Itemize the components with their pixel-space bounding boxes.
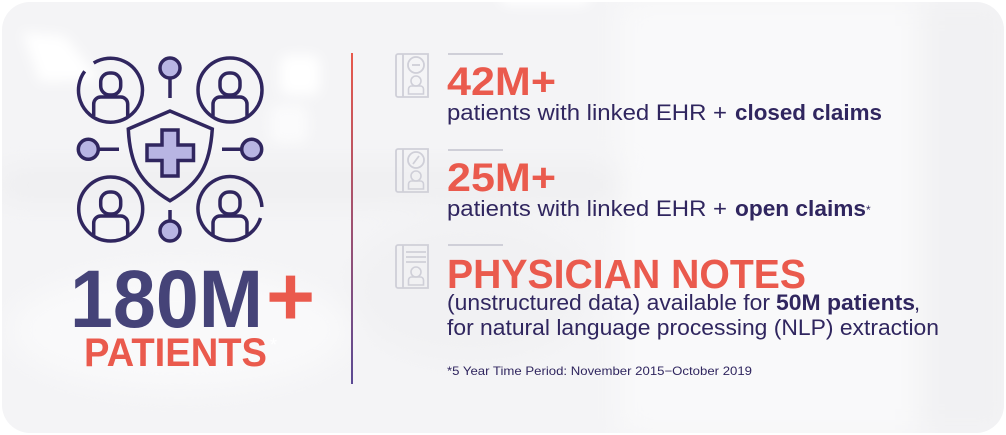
- icon: book with minus: [396, 54, 428, 97]
- stat: physician notes: (unstructured data) available for: [447, 290, 770, 315]
- stat: 42M+: [396, 53, 882, 125]
- stat: 25M+: *: [866, 203, 871, 217]
- subheading: patients: PATIENTS: [84, 331, 267, 375]
- icon: network of patients around a shield: [78, 58, 262, 241]
- icon: book with check: [396, 149, 428, 192]
- icon: book with lines: [396, 245, 428, 288]
- icon: patient top left: [78, 58, 142, 122]
- subheading: patients: *: [270, 335, 277, 355]
- headline: 180M+: 180M: [70, 254, 263, 345]
- icon: connector nodes: [78, 58, 262, 241]
- stat: 25M+: 25M+: [447, 156, 556, 200]
- icon: patient bottom right: [198, 177, 262, 241]
- stat: physician notes: 50M patients: [776, 290, 915, 315]
- footnote: *5 Year Time Period: November 2015−October 2019: [447, 364, 752, 378]
- stat: physician notes: [396, 244, 939, 340]
- stat: physician notes: for natural language processing (NLP) extraction: [447, 315, 939, 340]
- stat: 42M+: closed claims: [735, 100, 882, 125]
- vertical divider: [351, 53, 353, 384]
- stat: physician notes: PHYSICIAN NOTES: [447, 251, 806, 297]
- stat: 42M+: 42M+: [447, 60, 556, 104]
- headline: 180M+: +: [266, 249, 315, 343]
- stat: physician notes: ,: [914, 290, 920, 315]
- icon: patient bottom left: [79, 177, 143, 241]
- stat: 25M+: patients with linked EHR +: [447, 196, 727, 221]
- icon: patient top right: [198, 58, 262, 122]
- stat: 42M+: patients with linked EHR +: [447, 100, 727, 125]
- stat: 25M+: open claims: [735, 196, 866, 221]
- icon: shield: [128, 111, 212, 201]
- stat: 25M+: [396, 149, 871, 221]
- icon: medical cross: [147, 130, 194, 176]
